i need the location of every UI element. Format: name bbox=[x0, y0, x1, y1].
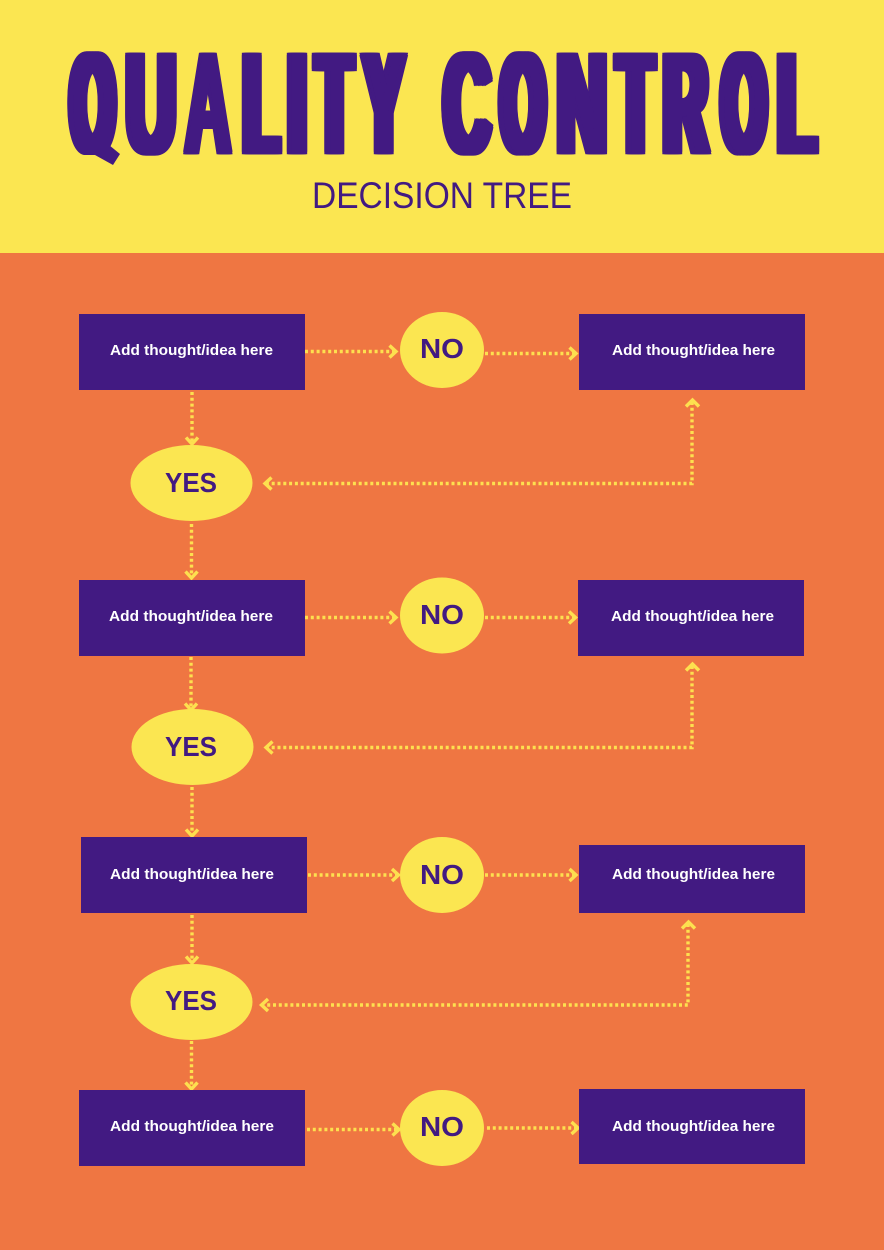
title: Q bbox=[70, 23, 114, 184]
box: row 1 left bbox=[79, 314, 305, 390]
oval: row 1 NO: NO bbox=[420, 333, 464, 364]
box: row 4 right bbox=[579, 1089, 805, 1164]
arrow: row 1 right box back to YES bbox=[265, 400, 699, 490]
box: row 3 right bbox=[579, 845, 805, 913]
oval: row 2 YES: YES bbox=[165, 731, 217, 762]
arrow: row 3 right box back to YES bbox=[262, 922, 695, 1011]
box: row 3 right: Add thought/idea here bbox=[612, 866, 775, 883]
oval: row 1 YES: YES bbox=[165, 467, 217, 498]
oval: row 4 NO: NO bbox=[420, 1111, 464, 1142]
title: O bbox=[722, 23, 766, 184]
title: N bbox=[557, 23, 607, 184]
title: O bbox=[501, 23, 545, 184]
box: row 4 right: Add thought/idea here bbox=[612, 1118, 775, 1135]
arrow: YES down to row 4 bbox=[186, 1041, 198, 1089]
arrow: row 2 down to YES bbox=[185, 657, 197, 710]
box: row 3 left: Add thought/idea here bbox=[110, 866, 274, 883]
arrow: YES down to row 3 bbox=[186, 787, 198, 836]
box: row 2 right bbox=[578, 580, 804, 656]
title: L bbox=[244, 23, 278, 184]
title: U bbox=[126, 23, 176, 184]
row 1 bbox=[79, 312, 805, 578]
box: row 4 left: Add thought/idea here bbox=[110, 1118, 274, 1135]
oval: row 1 YES bbox=[130, 445, 252, 521]
arrow: row 2 to NO bbox=[305, 612, 396, 624]
oval: row 4 NO bbox=[400, 1090, 484, 1166]
oval: row 2 NO bbox=[400, 578, 484, 654]
header band bbox=[0, 0, 884, 253]
row 3 bbox=[81, 837, 805, 1089]
title: I bbox=[287, 23, 307, 184]
arrow: YES down to row 2 bbox=[186, 524, 198, 578]
box: row 4 left bbox=[79, 1090, 305, 1166]
arrow: row 4 to NO bbox=[307, 1124, 399, 1136]
row 2 bbox=[79, 578, 804, 836]
title: L bbox=[778, 23, 816, 184]
arrow: row 2 NO to right box bbox=[485, 612, 576, 624]
oval: row 2 YES bbox=[132, 709, 254, 785]
row 4 bbox=[79, 1089, 805, 1166]
arrow: row 1 NO to right box bbox=[485, 348, 576, 360]
arrow: row 4 NO to right box bbox=[487, 1122, 578, 1134]
box: row 2 left bbox=[79, 580, 305, 656]
box: row 3 left bbox=[81, 837, 307, 913]
box: row 1 right bbox=[579, 314, 805, 390]
box: row 1 right: Add thought/idea here bbox=[612, 342, 775, 359]
box: row 2 right: Add thought/idea here bbox=[611, 608, 774, 625]
title: R bbox=[664, 23, 707, 184]
box: row 2 left: Add thought/idea here bbox=[109, 608, 273, 625]
title bbox=[67, 23, 820, 184]
arrow: row 1 down to YES bbox=[186, 392, 198, 444]
arrow: row 1 to NO bbox=[305, 346, 396, 358]
oval: row 1 NO bbox=[400, 312, 484, 388]
title: T bbox=[317, 23, 351, 184]
subtitle: DECISION TREE bbox=[312, 175, 572, 216]
title: A bbox=[184, 23, 230, 184]
oval: row 3 NO bbox=[400, 837, 484, 913]
oval: row 3 YES: YES bbox=[165, 985, 217, 1016]
oval: row 3 NO: NO bbox=[420, 859, 464, 890]
title: Y bbox=[364, 23, 403, 184]
arrow: row 3 down to YES bbox=[186, 915, 198, 963]
box: row 1 left: Add thought/idea here bbox=[110, 342, 273, 359]
oval: row 3 YES bbox=[130, 964, 252, 1040]
title: C bbox=[444, 23, 490, 184]
arrow: row 3 NO to right box bbox=[485, 869, 576, 881]
arrow: row 3 to NO bbox=[308, 869, 398, 881]
title: T bbox=[618, 23, 652, 184]
oval: row 2 NO: NO bbox=[420, 599, 464, 630]
arrow: row 2 right box back to YES bbox=[266, 664, 699, 754]
